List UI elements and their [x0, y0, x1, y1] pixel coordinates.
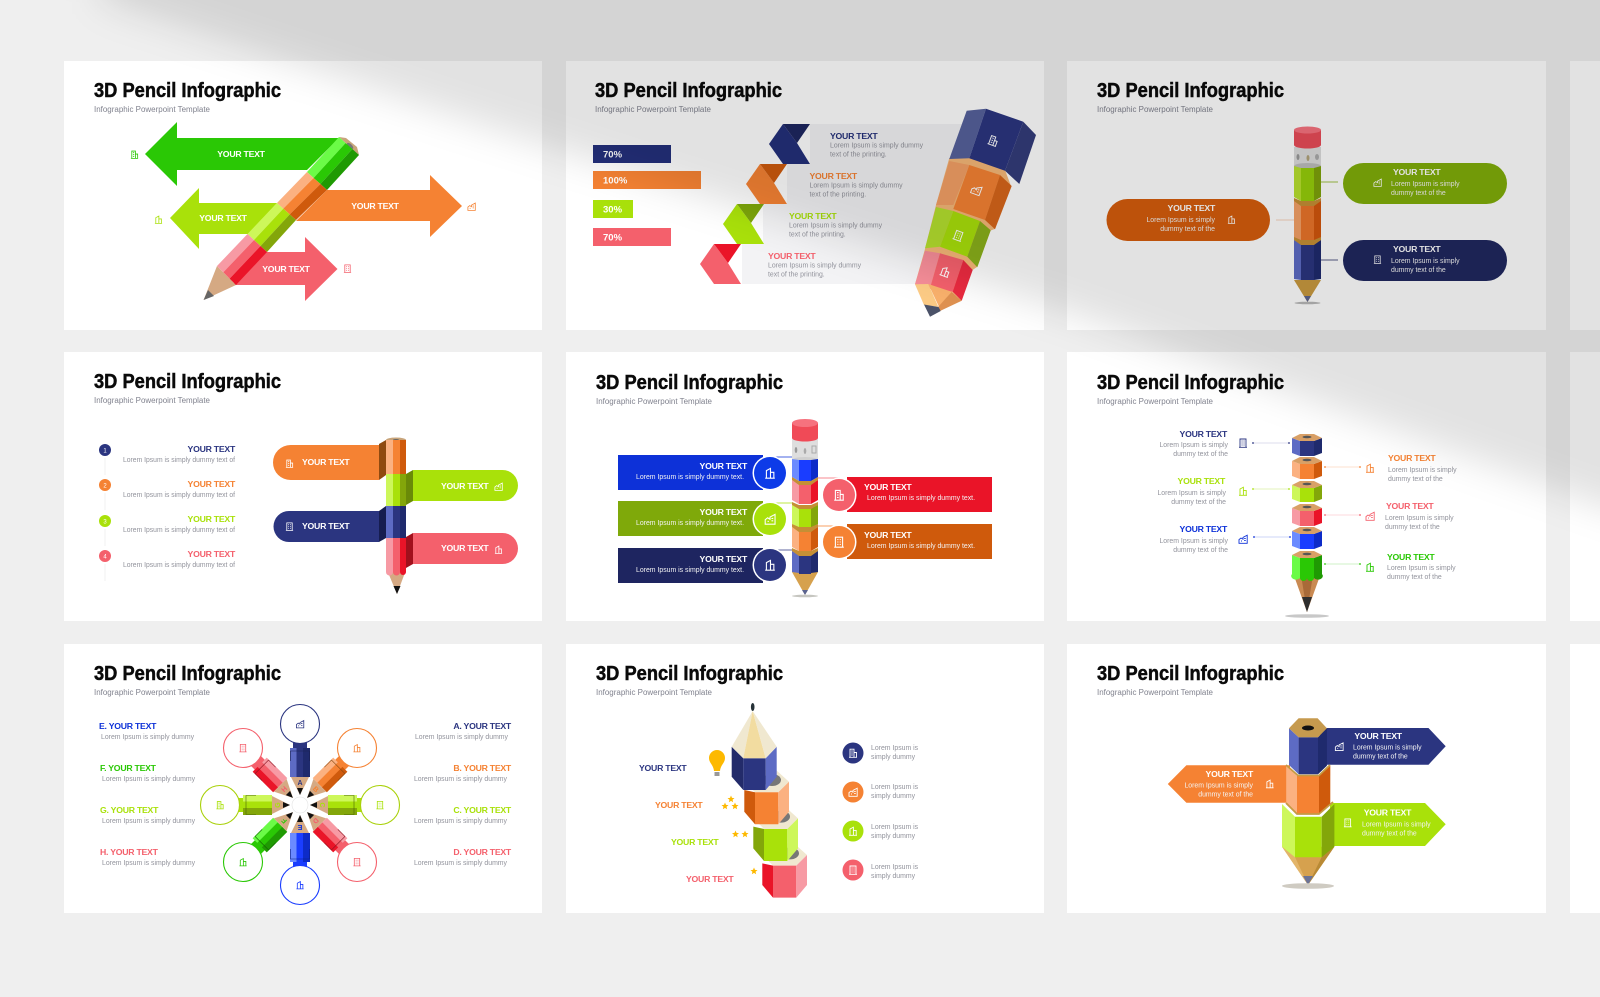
left labels: Lorem Ipsum is simply dummy	[101, 734, 195, 741]
ribbon row: lime: text of the printing.	[789, 232, 846, 238]
panel: signpost pencil	[1067, 644, 1546, 913]
legend item 1: Lorem Ipsum is	[871, 745, 919, 752]
panel: ribbon list with tilted pencil	[566, 61, 1044, 330]
pencil A	[290, 741, 310, 795]
right labels	[414, 721, 512, 867]
list item 1: Lorem Ipsum is simply dummy text of	[123, 457, 235, 464]
band: red: Lorem Ipsum is simply dummy text.	[867, 495, 975, 502]
percentage bars: 100%	[603, 176, 628, 186]
list item 3: YOUR TEXT	[188, 514, 236, 524]
ribbon: lime: YOUR TEXT	[441, 481, 489, 491]
arrow: navy: dummy text of the	[1353, 754, 1408, 761]
upright pencil	[792, 419, 818, 597]
band: blue: YOUR TEXT	[700, 461, 748, 471]
list item 4: 4	[103, 554, 107, 560]
legend item 4: simply dummy	[871, 873, 916, 880]
legend item 1	[842, 742, 919, 764]
list item 1	[99, 444, 236, 475]
ribbon row: orange: Lorem Ipsum is simply dummy	[810, 182, 903, 190]
circle E	[280, 866, 320, 904]
right label 2	[1324, 501, 1454, 531]
subtitle: Infographic Powerpoint Template	[596, 688, 713, 697]
vertical pencil	[386, 438, 406, 594]
ribbon row: orange: YOUR TEXT	[810, 171, 858, 181]
band: green: YOUR TEXT	[700, 507, 748, 517]
ribbon: navy	[274, 506, 386, 542]
pencil H: H	[281, 786, 289, 794]
pill: green: Lorem Ipsum is simply	[1391, 181, 1460, 188]
list item 4: YOUR TEXT	[188, 549, 236, 559]
hex stacked pencil	[1285, 434, 1329, 618]
right label 1	[1324, 453, 1457, 483]
arrow: lime	[155, 188, 277, 249]
pill: green: dummy text of the	[1391, 190, 1446, 197]
subtitle: Infographic Powerpoint Template	[596, 397, 713, 406]
circle D	[338, 842, 376, 882]
title: 3D Pencil Infographic	[596, 371, 783, 394]
legend item 3: Lorem Ipsum is	[871, 824, 919, 831]
title: 3D Pencil Infographic	[595, 79, 782, 102]
arrow: lime: YOUR TEXT	[1364, 808, 1412, 818]
right label 1: YOUR TEXT	[1388, 453, 1436, 463]
title: 3D Pencil Infographic	[596, 662, 783, 685]
label: lime: YOUR TEXT	[671, 837, 719, 847]
circle B	[338, 728, 376, 768]
legend item 4	[842, 860, 919, 880]
title: 3D Pencil Infographic	[94, 370, 281, 393]
stars	[722, 796, 758, 874]
grey band behind ribbons	[742, 124, 962, 284]
band: red: YOUR TEXT	[864, 482, 912, 492]
band: red	[818, 477, 992, 512]
list item 2: Lorem Ipsum is simply dummy text of	[123, 492, 235, 499]
ribbon row: pink: YOUR TEXT	[768, 251, 816, 261]
band: green: Lorem Ipsum is simply dummy text.	[636, 520, 744, 527]
pill: green	[1321, 163, 1507, 204]
legend item 3	[842, 820, 919, 842]
arrow: orange	[296, 175, 475, 237]
arrow: pink	[232, 237, 351, 301]
panel: pencil with band labels	[566, 352, 1044, 621]
pill: navy: dummy text of the	[1391, 267, 1446, 274]
right labels: A. YOUR TEXT	[453, 721, 512, 731]
title: 3D Pencil Infographic	[1097, 371, 1284, 394]
left label 3: dummy text of the	[1173, 547, 1228, 554]
band: orange: YOUR TEXT	[864, 530, 912, 540]
panel: partial next column row 1	[1570, 61, 1600, 330]
right label 1: dummy text of the	[1388, 476, 1443, 483]
percentage bars: 70%	[603, 232, 623, 244]
ribbon row: navy: YOUR TEXT	[830, 131, 878, 141]
legend item 2	[842, 782, 919, 802]
left labels: Lorem Ipsum is simply dummy	[102, 860, 196, 867]
band: orange	[818, 524, 992, 560]
ribbon: orange: YOUR TEXT	[302, 457, 350, 467]
ribbon row: orange: text of the printing.	[810, 192, 866, 198]
list item 4	[99, 549, 236, 581]
arrow: navy	[1320, 728, 1446, 765]
right labels: Lorem Ipsum is simply dummy	[414, 860, 508, 867]
right labels: Lorem Ipsum is simply dummy	[414, 818, 508, 825]
left labels: E. YOUR TEXT	[99, 721, 157, 731]
band: blue	[618, 455, 793, 490]
upright pencil	[1294, 126, 1321, 304]
title: 3D Pencil Infographic	[94, 662, 281, 685]
window light shadow overlay	[100, 0, 1600, 530]
panel: stacked isometric pencil	[566, 644, 1044, 913]
right label 1: Lorem Ipsum is simply	[1388, 467, 1457, 474]
arrow: lime: YOUR TEXT	[199, 213, 248, 223]
arrow: navy: YOUR TEXT	[1354, 731, 1403, 741]
panel: upright pencil with pills	[1067, 61, 1546, 330]
ribbon row: lime	[723, 204, 883, 244]
list item 2: 2	[103, 484, 107, 490]
circle G	[200, 786, 240, 824]
stacked pencil	[732, 703, 807, 898]
ribbon row: pink: text of the printing.	[768, 272, 825, 278]
title: 3D Pencil Infographic	[1097, 662, 1284, 685]
arrow: orange	[1168, 765, 1290, 803]
right label 3: Lorem Ipsum is simply	[1387, 565, 1456, 572]
left label 1: Lorem Ipsum is simply	[1159, 442, 1229, 449]
arrow: orange: Lorem Ipsum is simply	[1184, 783, 1254, 790]
subtitle: Infographic Powerpoint Template	[94, 396, 211, 405]
left labels: H. YOUR TEXT	[100, 847, 159, 857]
left label 2	[1157, 476, 1290, 506]
right label 3	[1324, 552, 1456, 581]
band: navy: Lorem Ipsum is simply dummy text.	[636, 567, 744, 574]
arrow: lime	[1330, 803, 1446, 846]
left labels: G. YOUR TEXT	[100, 805, 159, 815]
ribbon: navy: YOUR TEXT	[302, 521, 350, 531]
band: green	[618, 501, 793, 536]
ribbon: pink	[406, 533, 518, 568]
panel: radial pencils	[64, 644, 542, 913]
list item 3: 3	[103, 520, 107, 526]
arrow: pink: YOUR TEXT	[262, 264, 311, 274]
pill: green: YOUR TEXT	[1393, 167, 1441, 177]
circle C	[360, 786, 400, 824]
right label 2: YOUR TEXT	[1386, 501, 1434, 511]
left label 1: YOUR TEXT	[1180, 429, 1228, 439]
panel: partial next column row 2	[1570, 352, 1600, 621]
right labels: D. YOUR TEXT	[453, 847, 512, 857]
ribbon row: pink	[700, 244, 862, 284]
subtitle: Infographic Powerpoint Template	[1097, 105, 1214, 114]
band: blue: Lorem Ipsum is simply dummy text.	[636, 474, 744, 481]
list item 3	[99, 514, 236, 546]
arrow: lime: Lorem Ipsum is simply	[1362, 821, 1431, 828]
icon: light bulb	[709, 750, 725, 776]
list item 4: Lorem Ipsum is simply dummy text of	[123, 562, 235, 569]
band: navy: YOUR TEXT	[700, 554, 748, 564]
ribbon: pink: YOUR TEXT	[441, 543, 489, 553]
right label 3: dummy text of the	[1387, 574, 1442, 581]
right labels: Lorem Ipsum is simply dummy	[414, 776, 508, 783]
ribbon row: navy: Lorem Ipsum is simply dummy	[830, 142, 924, 150]
panel: diagonal arrows pencil	[64, 61, 542, 330]
right labels: B. YOUR TEXT	[453, 763, 512, 773]
list item 3: Lorem Ipsum is simply dummy text of	[123, 527, 235, 534]
circle F	[224, 842, 262, 882]
left label 2: dummy text of the	[1171, 499, 1226, 506]
list item 2	[99, 479, 236, 510]
left labels: Lorem Ipsum is simply dummy	[102, 818, 196, 825]
diagonal pencil	[204, 137, 359, 300]
pencil H	[248, 753, 300, 805]
pencil D	[300, 805, 352, 857]
list item 1: YOUR TEXT	[188, 444, 236, 454]
left labels: F. YOUR TEXT	[100, 763, 157, 773]
left label 3: Lorem Ipsum is simply	[1159, 538, 1229, 545]
pencil C: C	[318, 802, 325, 808]
subtitle: Infographic Powerpoint Template	[94, 105, 211, 114]
ribbon: lime	[406, 470, 518, 505]
left label 3	[1159, 524, 1291, 554]
right labels: Lorem Ipsum is simply dummy	[415, 734, 509, 741]
title: 3D Pencil Infographic	[94, 79, 281, 102]
pill: orange	[1106, 199, 1294, 241]
percentage bars	[593, 145, 701, 246]
legend item 2: simply dummy	[871, 793, 916, 800]
left label 2: YOUR TEXT	[1178, 476, 1226, 486]
pencil F: F	[280, 816, 289, 824]
left labels: Lorem Ipsum is simply dummy	[102, 776, 196, 783]
panel: partial next column row 3	[1570, 644, 1600, 913]
circle H	[224, 728, 262, 768]
left labels	[99, 721, 196, 867]
arrow: orange: YOUR TEXT	[351, 201, 400, 211]
ribbon row: pink: Lorem Ipsum is simply dummy	[768, 262, 862, 270]
subtitle: Infographic Powerpoint Template	[1097, 397, 1214, 406]
pill: orange: YOUR TEXT	[1168, 203, 1216, 213]
ribbon row: navy: text of the printing.	[830, 152, 887, 158]
pencil B	[300, 753, 352, 805]
panel: numbered list with ribbon pencil	[64, 352, 542, 621]
panel: hex segment pencil	[1067, 352, 1546, 621]
arrow: green: YOUR TEXT	[217, 149, 266, 159]
list item 2: YOUR TEXT	[188, 479, 236, 489]
pencil E	[290, 815, 310, 869]
signpost pencil	[1282, 718, 1334, 889]
legend item 1: simply dummy	[871, 754, 916, 761]
left label 3: YOUR TEXT	[1180, 524, 1228, 534]
band: navy	[618, 548, 793, 583]
label: pink: YOUR TEXT	[686, 874, 734, 884]
arrow: navy: Lorem Ipsum is simply	[1353, 745, 1422, 752]
right label 2: dummy text of the	[1385, 524, 1440, 531]
arrow: lime: dummy text of the	[1362, 830, 1417, 837]
band: orange: Lorem Ipsum is simply dummy text.	[867, 543, 975, 550]
arrow: orange: YOUR TEXT	[1206, 769, 1254, 779]
pencil G	[236, 795, 290, 815]
pill: navy: YOUR TEXT	[1393, 244, 1441, 254]
ribbon row: lime: YOUR TEXT	[789, 211, 837, 221]
arrow: orange: dummy text of the	[1198, 792, 1253, 799]
label: orange: YOUR TEXT	[655, 800, 703, 810]
left label 2: Lorem Ipsum is simply	[1157, 490, 1227, 497]
legend item 2: Lorem Ipsum is	[871, 784, 919, 791]
center hub	[292, 797, 308, 813]
subtitle: Infographic Powerpoint Template	[1097, 688, 1214, 697]
title: 3D Pencil Infographic	[1097, 79, 1284, 102]
pencil A: A	[297, 780, 303, 787]
subtitle: Infographic Powerpoint Template	[595, 105, 712, 114]
tilted 3D pencil	[915, 109, 1036, 317]
pencil C	[310, 795, 364, 815]
legend item 4: Lorem Ipsum is	[871, 864, 919, 871]
ribbon row: navy	[769, 124, 924, 164]
pill: navy	[1321, 240, 1507, 281]
left label 1	[1159, 429, 1290, 458]
pencil F	[248, 805, 300, 857]
arrow: green	[131, 122, 339, 186]
left label 1: dummy text of the	[1173, 451, 1228, 458]
percentage bars: 30%	[603, 204, 623, 216]
subtitle: Infographic Powerpoint Template	[94, 688, 211, 697]
circle A	[280, 704, 320, 744]
right label 3: YOUR TEXT	[1387, 552, 1435, 562]
ribbon row: lime: Lorem Ipsum is simply dummy	[789, 222, 883, 230]
pill: orange: dummy text of the	[1160, 226, 1215, 233]
ribbon row: orange	[746, 164, 903, 204]
pill: orange: Lorem Ipsum is simply	[1146, 217, 1216, 224]
label: navy: YOUR TEXT	[639, 763, 687, 773]
pencil B: B	[311, 786, 319, 794]
pencil E: E	[297, 823, 302, 830]
list item 1: 1	[103, 448, 107, 454]
legend item 3: simply dummy	[871, 833, 916, 840]
right label 2: Lorem Ipsum is simply	[1385, 515, 1454, 522]
percentage bars: 70%	[603, 150, 623, 160]
ribbon: orange	[273, 440, 386, 480]
pencil D: D	[311, 816, 319, 824]
pill: navy: Lorem Ipsum is simply	[1391, 258, 1460, 265]
right labels: C. YOUR TEXT	[453, 805, 512, 815]
pencil G: G	[275, 802, 282, 808]
